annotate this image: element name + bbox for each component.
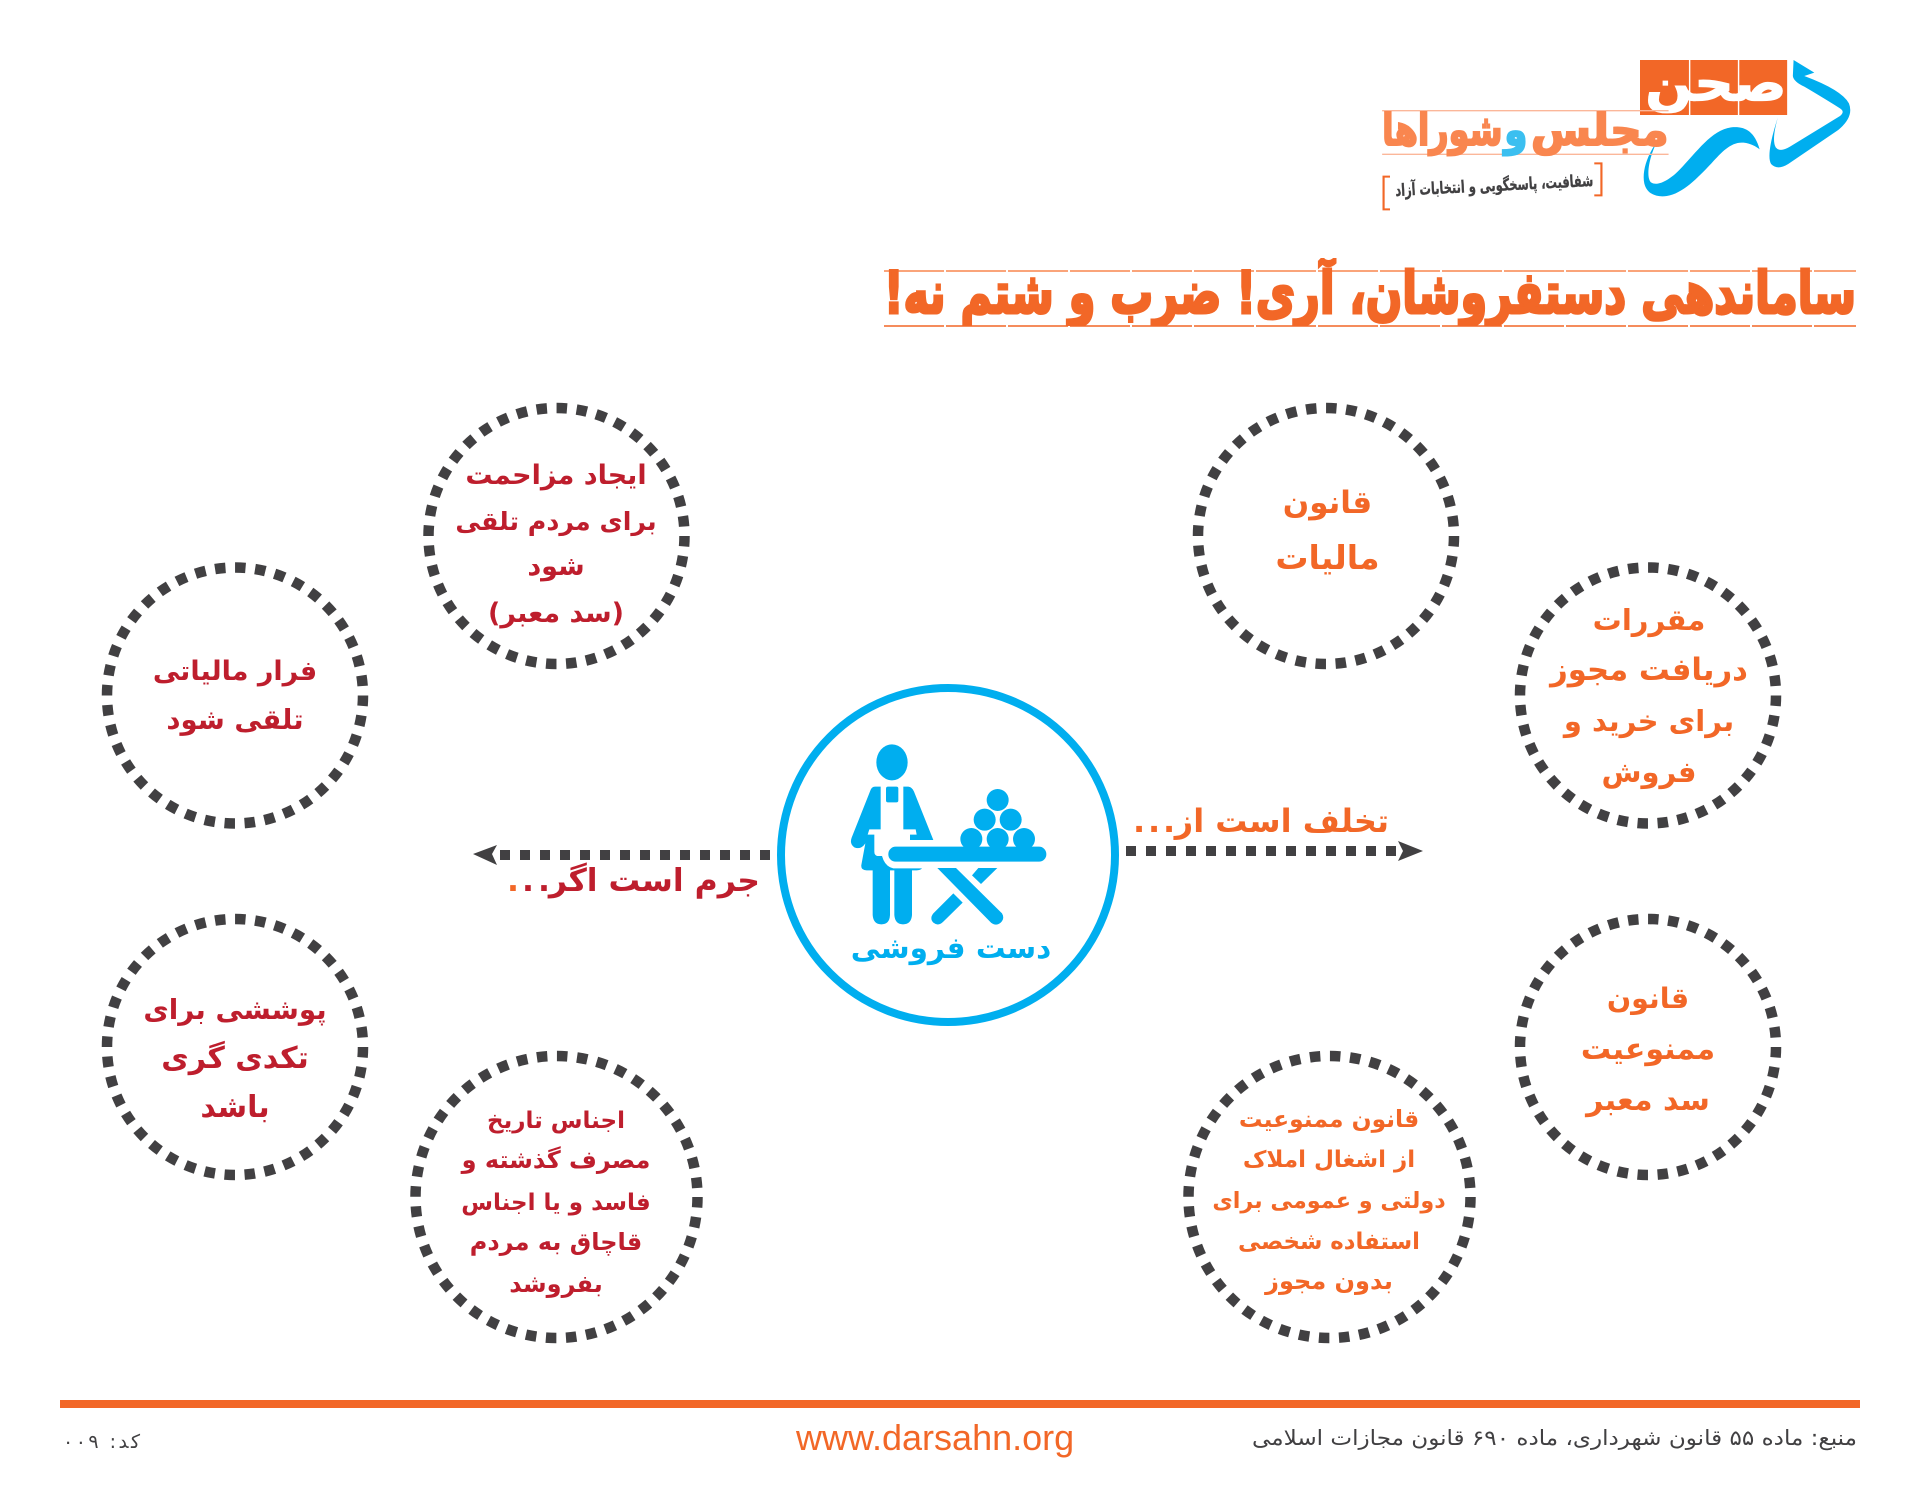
panel: tax evasion: فرار مالیاتی xyxy=(153,656,317,687)
panel: expired goods xyxy=(416,1056,698,1338)
panel: public property law: از اشغال املاک xyxy=(1243,1147,1415,1173)
panel: public property law: استفاده شخصی xyxy=(1238,1229,1420,1255)
label: crime if: . xyxy=(538,863,550,899)
panel: tax law: قانون xyxy=(1283,485,1372,521)
panel: expired goods: اجناس تاریخ xyxy=(487,1108,625,1134)
panel: permit regulations: مقررات xyxy=(1593,603,1705,637)
panel: cover for begging: پوششی برای xyxy=(143,993,327,1026)
label: violation of: . xyxy=(1163,802,1175,840)
panel: tax law xyxy=(1198,408,1454,664)
label: crime if: جرم است اگر xyxy=(547,862,760,899)
panel: disturbing people: (سد معبر) xyxy=(488,598,624,629)
logo: شوراها xyxy=(1382,104,1503,156)
panel: disturbing people xyxy=(428,408,684,664)
panel: public property law: بدون مجوز xyxy=(1264,1267,1393,1295)
panel: expired goods: قاچاق به مردم xyxy=(470,1228,642,1256)
logo xyxy=(1382,55,1850,209)
footer: website: www.darsahn.org xyxy=(795,1417,1074,1458)
central circle: street vending xyxy=(781,688,1115,1022)
panel: permit regulations xyxy=(1520,568,1776,824)
arrow: right, violation xyxy=(1126,841,1423,861)
panel: passage obstruction law xyxy=(1520,919,1776,1175)
panel: disturbing people: شود xyxy=(527,551,585,582)
label: violation of: . xyxy=(1148,802,1160,840)
panel: permit regulations: دریافت مجوز xyxy=(1548,653,1748,688)
label: crime if: . xyxy=(507,863,519,899)
arrow: left, crime xyxy=(473,845,770,865)
icon: vendor with ironing table xyxy=(850,744,1046,925)
logo: و xyxy=(1503,104,1528,156)
panel: cover for begging: تکدی گری xyxy=(161,1040,309,1076)
panel: expired goods: فاسد و یا اجناس xyxy=(461,1190,651,1216)
logo: صحن xyxy=(1645,55,1786,113)
panel: cover for begging: باشد xyxy=(200,1090,270,1125)
panel: permit regulations: برای خرید و xyxy=(1562,704,1734,738)
panel: permit regulations: فروش xyxy=(1601,755,1697,789)
label: crime if: . xyxy=(522,863,534,899)
panel: passage obstruction law: ممنوعیت xyxy=(1581,1032,1715,1067)
panel: tax evasion xyxy=(107,568,363,824)
panel: passage obstruction law: سد معبر xyxy=(1584,1083,1710,1118)
panel: expired goods: بفروشد xyxy=(509,1270,603,1298)
panel: expired goods: مصرف گذشته و xyxy=(461,1146,650,1174)
panel: public property law: دولتی و عمومی برای xyxy=(1212,1188,1446,1214)
footer rule xyxy=(60,1400,1860,1408)
panel: tax law: مالیات xyxy=(1275,538,1380,577)
label: violation of: تخلف است از xyxy=(1173,802,1389,840)
panel: public property law xyxy=(1188,1056,1470,1338)
footer: code: کد: ۰۰۹ xyxy=(63,1431,141,1453)
center label: دست فروشی xyxy=(851,931,1051,965)
panel: passage obstruction law: قانون xyxy=(1607,982,1689,1015)
panel: cover for begging xyxy=(107,919,363,1175)
logo: مجلس xyxy=(1531,104,1669,156)
label: violation of: . xyxy=(1133,802,1145,840)
footer: source: منبع: ماده ۵۵ قانون شهرداری، ماده ۶۹۰ قانون مجازات اسلامی xyxy=(1252,1426,1857,1450)
panel: tax evasion: تلقی شود xyxy=(166,704,304,736)
logo: شفافیت، پاسخگویی و انتخابات آزاد xyxy=(1395,170,1594,201)
panel: disturbing people: ایجاد مزاحمت xyxy=(465,460,647,491)
panel: public property law: قانون ممنوعیت xyxy=(1239,1105,1419,1133)
panel: disturbing people: برای مردم تلقی xyxy=(455,507,657,537)
